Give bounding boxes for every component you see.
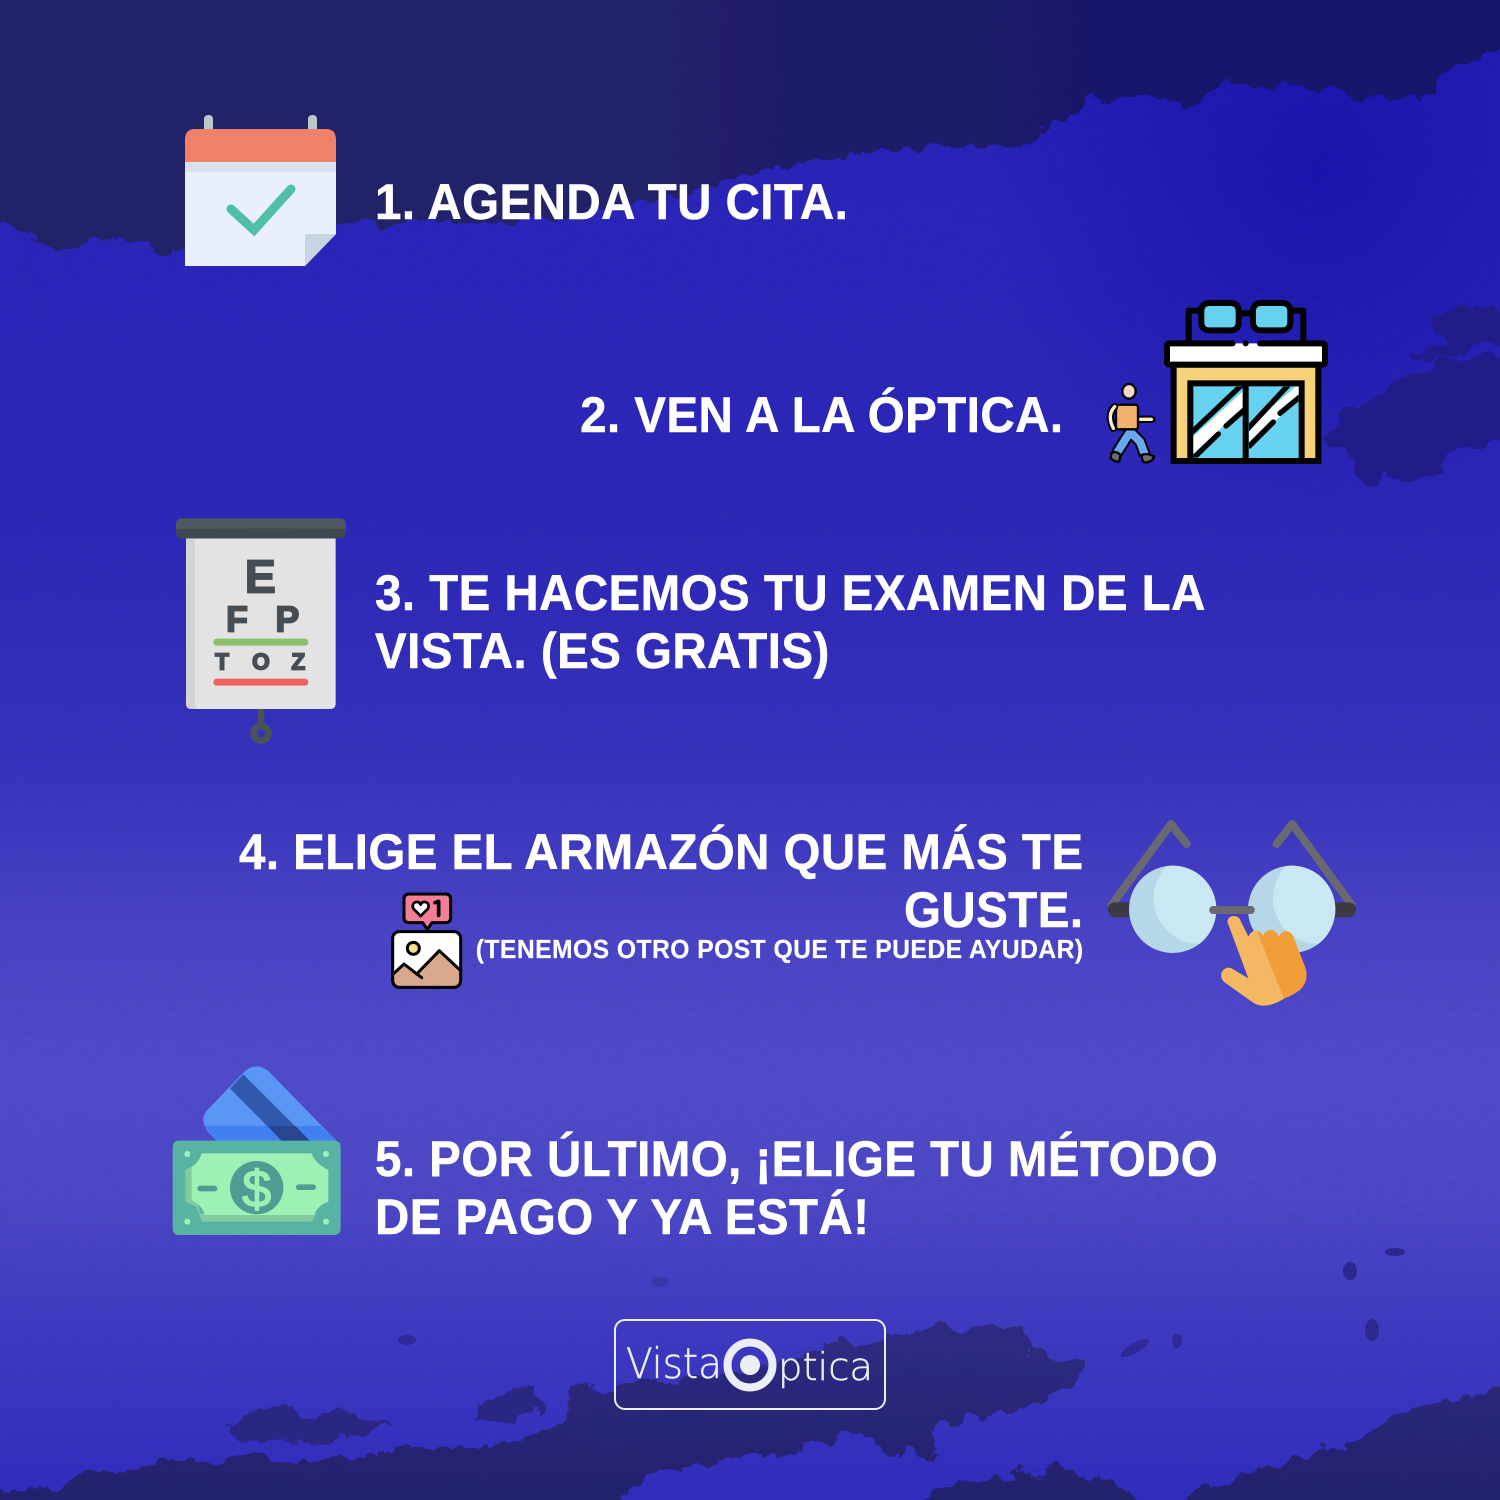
icon: photo with like notification [393, 894, 461, 987]
icon: eye chart: P [275, 599, 299, 640]
step 5 text: DE PAGO Y YA ESTÁ! [375, 1190, 869, 1245]
icon: eye chart: Z [291, 649, 305, 675]
step 3 text: 3. TE HACEMOS TU EXAMEN DE LA [375, 566, 1206, 621]
icon: optical shop with glasses on roof [1167, 303, 1325, 461]
step 2 text: 2. VEN A LA ÓPTICA. [580, 387, 1064, 443]
icon: round glasses with pointing hand [1108, 824, 1364, 1006]
step 1 text: 1. AGENDA TU CITA. [375, 175, 848, 230]
step 3 text: VISTA. (ES GRATIS) [375, 624, 830, 679]
step 5 text: 5. POR ÚLTIMO, ¡ELIGE TU MÉTODO [375, 1131, 1218, 1187]
icon: eye chart: O [252, 648, 270, 674]
step 4 text: GUSTE. [904, 883, 1084, 938]
logo: Vista Optica [615, 1320, 885, 1409]
icon: credit card and banknote [173, 1066, 341, 1235]
step 4 text: 4. ELIGE EL ARMAZÓN QUE MÁS TE [239, 824, 1084, 880]
icon: eye chart: F [226, 599, 248, 640]
icon: calendar with check [185, 115, 336, 266]
icon: eye chart: T [215, 649, 229, 675]
step 4 note: (TENEMOS OTRO POST QUE TE PUEDE AYUDAR) [476, 935, 1084, 964]
icon: eye chart [176, 518, 346, 741]
logo: Vista Optica: Vista [626, 1339, 722, 1388]
icon: walking person [1110, 384, 1154, 463]
icon: eye chart: E [245, 550, 276, 602]
icon: credit card and banknote: $ [242, 1160, 271, 1218]
logo: Vista Optica: ptica [778, 1345, 873, 1389]
